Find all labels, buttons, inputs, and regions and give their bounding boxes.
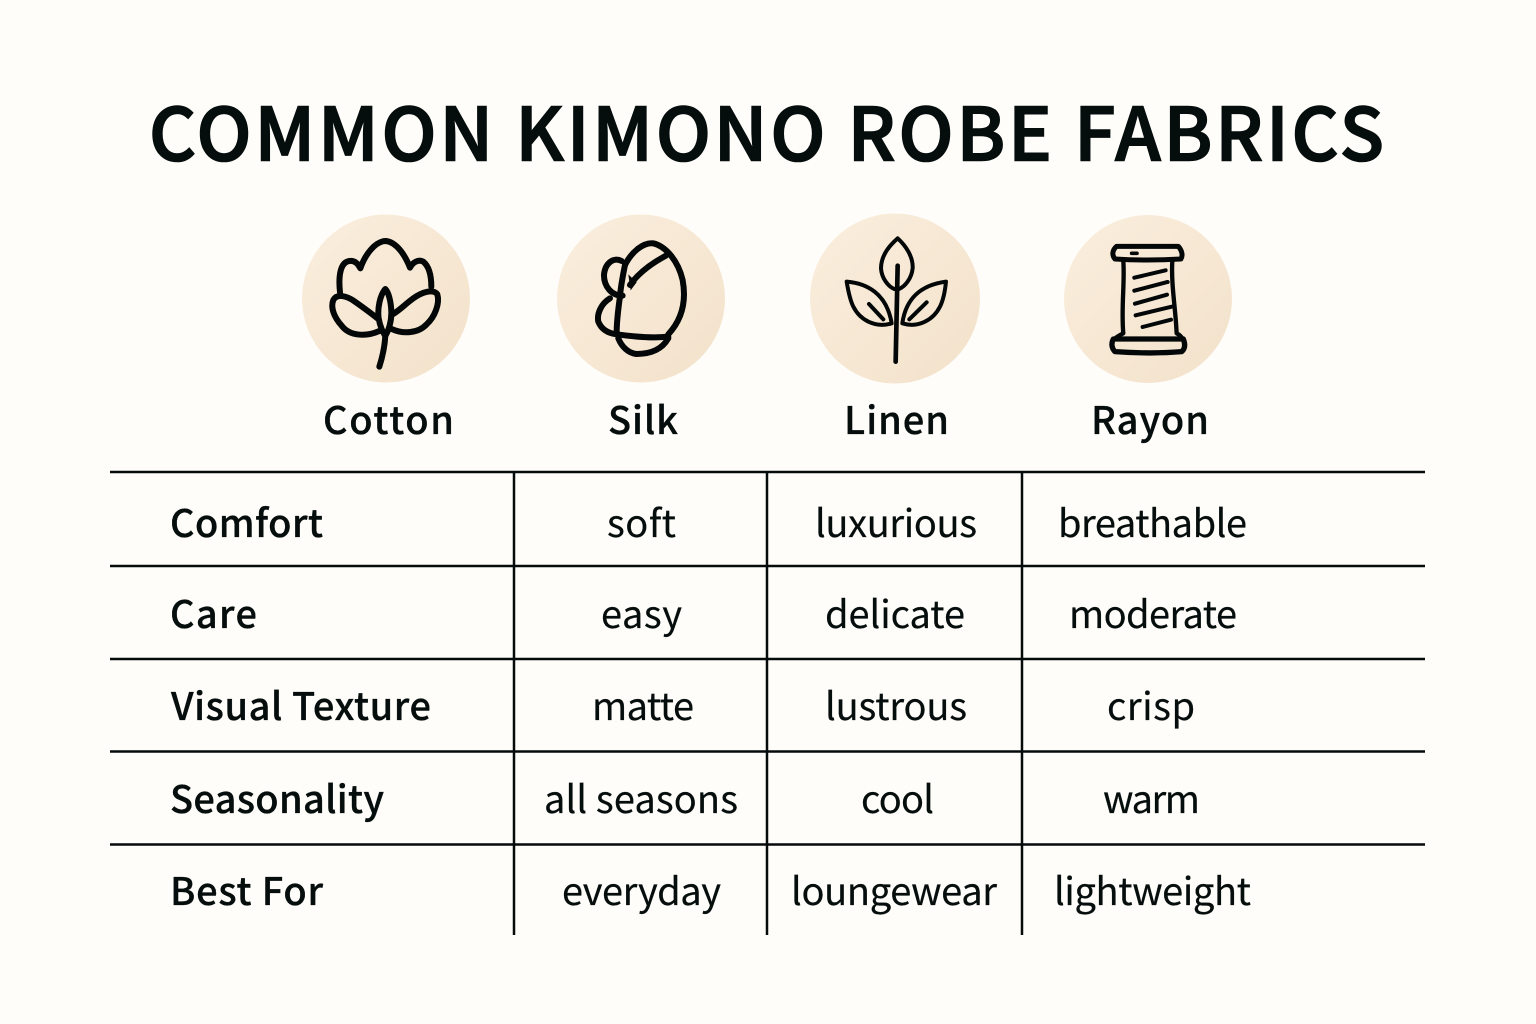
row: Visual Texture: Visual Texture xyxy=(170,676,431,731)
heading: Cotton: Cotton xyxy=(323,390,454,445)
heading: Linen: Linen xyxy=(844,390,949,445)
icon: cotton boll xyxy=(302,214,470,382)
icon: linen sprig xyxy=(810,214,980,384)
row: Care: easy xyxy=(601,584,682,639)
row: Care: delicate xyxy=(825,584,965,639)
heading: Rayon: Rayon xyxy=(1091,390,1209,445)
row: Visual Texture: matte xyxy=(592,676,694,731)
row: Seasonality: Seasonality xyxy=(170,769,384,824)
row: Comfort: soft xyxy=(607,493,676,548)
row: Seasonality: all seasons xyxy=(544,769,738,824)
row: Seasonality: warm xyxy=(1103,769,1200,824)
icon: rayon thread spool xyxy=(1064,215,1232,383)
icon: silk cocoon xyxy=(557,214,725,382)
row: Best For: lightweight xyxy=(1054,861,1251,916)
title: COMMON KIMONO ROBE FABRICS xyxy=(149,76,1384,182)
comparison table xyxy=(110,472,1425,935)
row: Best For: loungewear xyxy=(791,861,997,916)
heading: Silk: Silk xyxy=(608,390,678,445)
row: Comfort: Comfort xyxy=(170,493,323,548)
row: Visual Texture: crisp xyxy=(1107,676,1195,731)
row: Comfort: breathable xyxy=(1058,493,1247,548)
row: Seasonality xyxy=(170,769,1200,824)
column headings xyxy=(323,390,1209,445)
row: Seasonality: cool xyxy=(861,769,934,824)
row: Comfort xyxy=(170,493,1247,548)
row: Care: moderate xyxy=(1069,584,1237,639)
row: Best For xyxy=(170,861,1251,916)
row: Visual Texture: lustrous xyxy=(825,676,967,731)
row: Visual Texture xyxy=(170,676,1195,731)
row: Best For: everyday xyxy=(562,861,721,916)
row: Care xyxy=(170,584,1237,639)
row: Care: Care xyxy=(170,584,257,639)
row: Best For: Best For xyxy=(170,861,323,916)
row: Comfort: luxurious xyxy=(815,493,977,548)
